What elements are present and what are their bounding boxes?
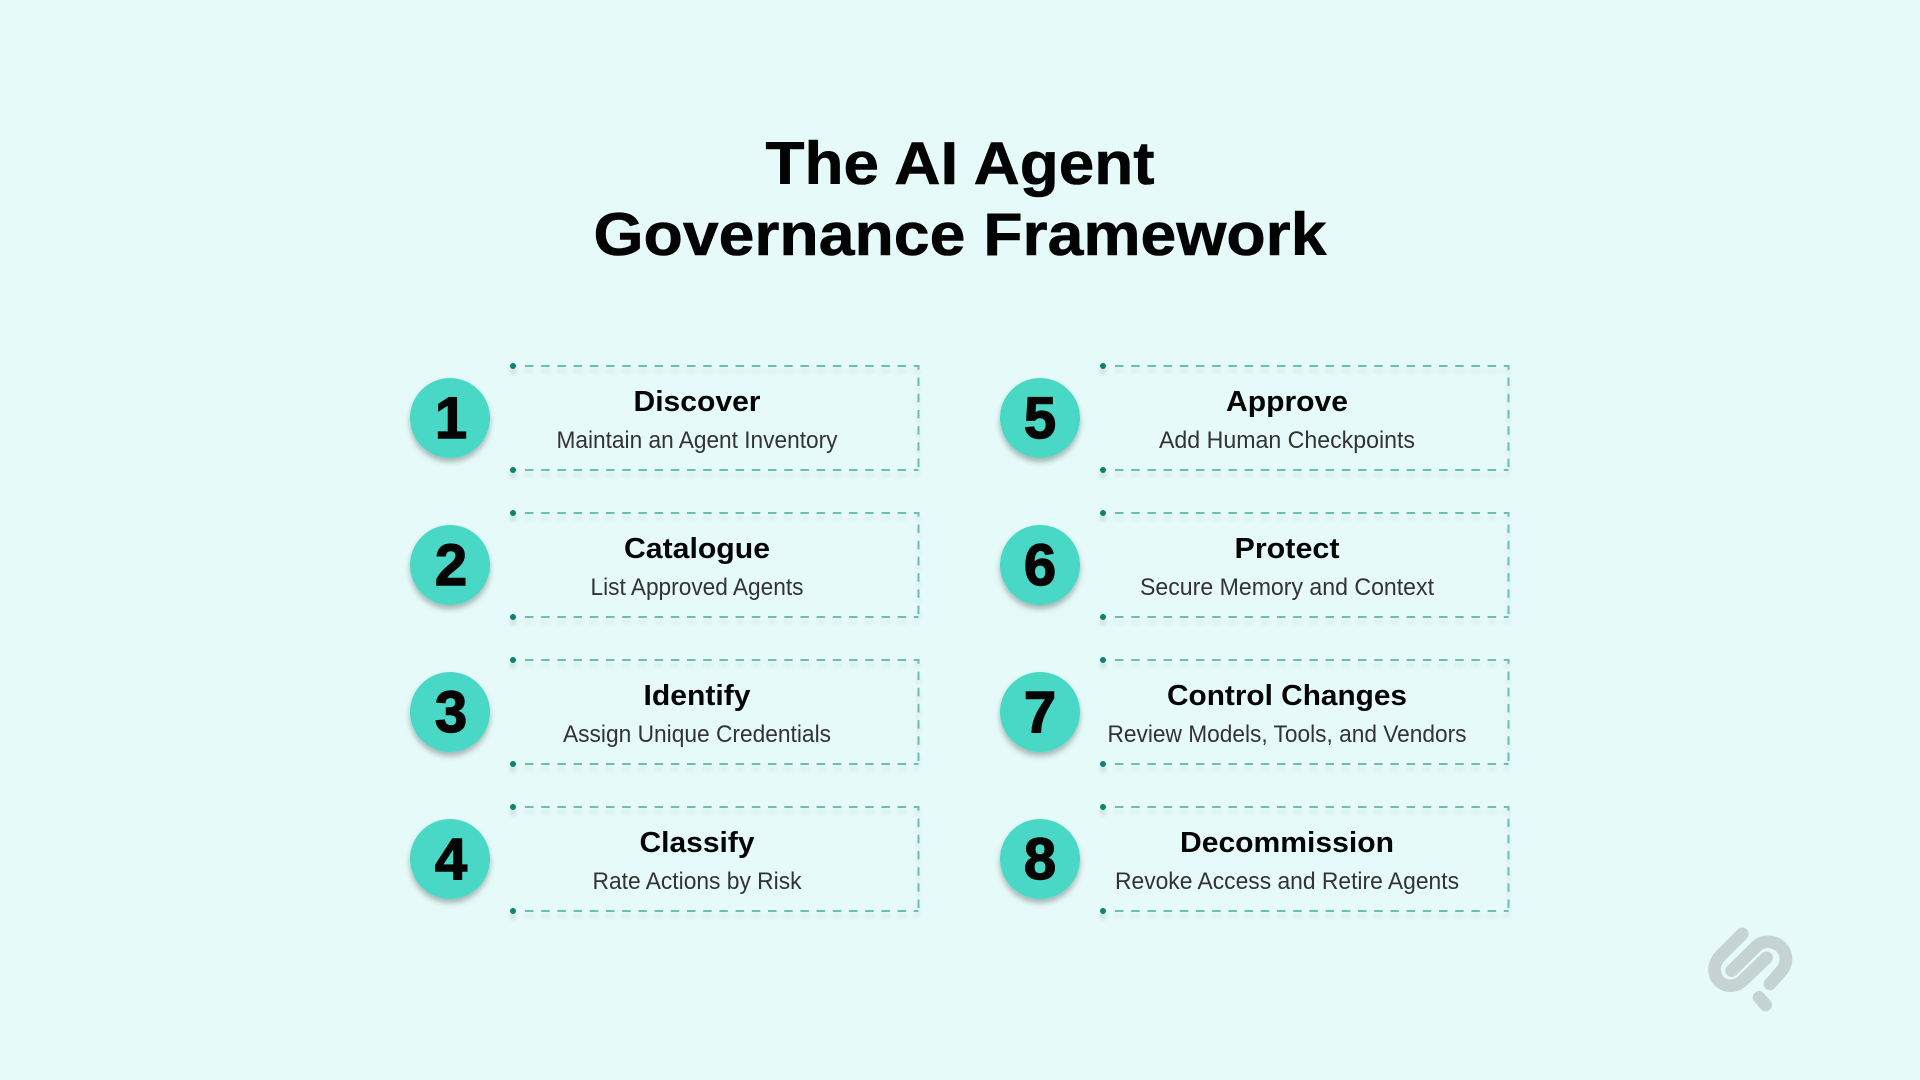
panel: step 4 Classify (410, 804, 918, 914)
number badge 6: 6 (1024, 533, 1056, 598)
description: Maintain an Agent Inventory (556, 427, 838, 454)
number badge 1 (410, 378, 490, 458)
dashed frame (510, 657, 918, 767)
dashed frame (1100, 510, 1508, 620)
number badge 7: 7 (1024, 680, 1056, 745)
panel: step 5 Approve (1000, 363, 1508, 473)
description: Revoke Access and Retire Agents (1115, 868, 1459, 895)
number badge 4 (410, 819, 490, 899)
panel: step 3 Identify (410, 657, 918, 767)
heading: Classify (640, 827, 754, 859)
number badge 6 (1000, 525, 1080, 605)
panel: step 2 Catalogue (410, 510, 918, 620)
number badge 7 (1000, 672, 1080, 752)
description: Review Models, Tools, and Vendors (1108, 721, 1466, 748)
number badge 5: 5 (1024, 386, 1056, 451)
heading: Identify (644, 680, 750, 712)
description: Add Human Checkpoints (1159, 427, 1415, 454)
dashed frame (510, 363, 918, 473)
number badge 8: 8 (1024, 827, 1056, 892)
panel: step 7 Control Changes (1000, 657, 1508, 767)
heading: Discover (634, 386, 760, 418)
description: Assign Unique Credentials (563, 721, 831, 748)
description: Rate Actions by Risk (592, 868, 802, 895)
number badge 2: 2 (435, 533, 467, 598)
panel: step 6 Protect (1000, 510, 1508, 620)
title (594, 130, 1327, 268)
icon: logo mark (1715, 934, 1786, 1005)
title: Governance Framework (594, 201, 1327, 268)
number badge 3: 3 (435, 680, 467, 745)
panel: step 8 Decommission (1000, 804, 1508, 914)
number badge 4: 4 (435, 827, 467, 892)
number badge 2 (410, 525, 490, 605)
description: Secure Memory and Context (1140, 574, 1434, 601)
dashed frame (1100, 363, 1508, 473)
number badge 1: 1 (435, 386, 467, 451)
dashed frame (510, 510, 918, 620)
title: The AI Agent (766, 130, 1155, 197)
heading: Decommission (1180, 827, 1394, 859)
heading: Protect (1234, 533, 1340, 565)
number badge 8 (1000, 819, 1080, 899)
heading: Catalogue (624, 533, 770, 565)
dashed frame (510, 804, 918, 914)
heading: Approve (1226, 386, 1348, 418)
dashed frame (1100, 657, 1508, 767)
number badge 3 (410, 672, 490, 752)
heading: Control Changes (1167, 680, 1407, 712)
dashed frame (1100, 804, 1508, 914)
description: List Approved Agents (590, 574, 804, 601)
number badge 5 (1000, 378, 1080, 458)
panel: step 1 Discover (410, 363, 918, 473)
